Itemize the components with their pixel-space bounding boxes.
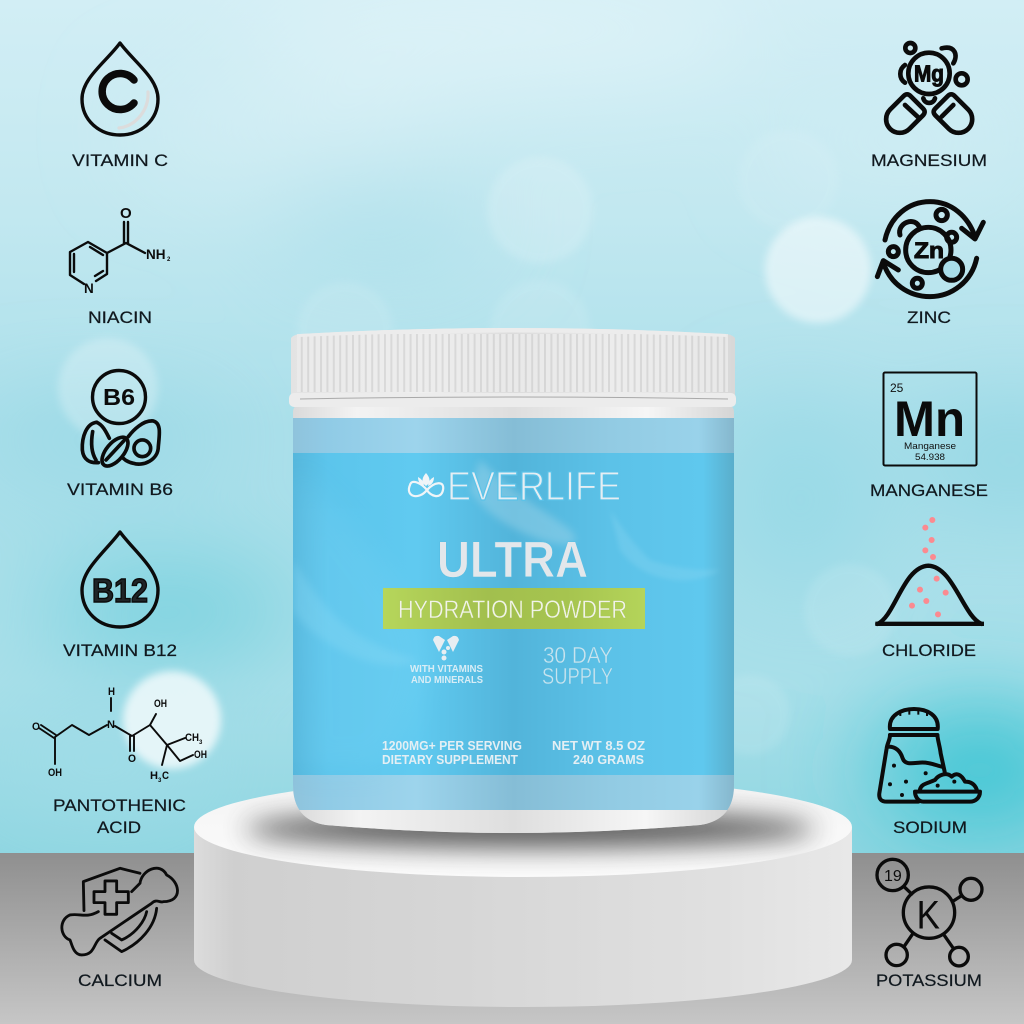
icon: periodic table tile: 25 [890,381,904,395]
icon: periodic table tile [884,372,976,466]
icon: periodic table tile: 54.938 [915,452,945,463]
callout: 30 day supply: SUPPLY [542,663,613,689]
nutrient: zinc [877,202,983,327]
icon: capsules and drops [433,636,459,660]
callout: 30 day supply [542,642,613,689]
nutrient: sodium [879,709,980,837]
label: VITAMIN C [72,152,168,170]
net weight: NET WT 8.5 OZ [552,739,645,753]
icon: infinity with leaves [409,473,443,496]
nutrient: potassium [876,859,982,990]
icon: pantothenic acid molecule: H [150,770,158,782]
icon: pantothenic acid molecule: O [32,721,40,733]
podium [194,777,852,1007]
icon: vitamin C drop [82,43,158,135]
serving info: 1200MG+ PER SERVING [382,739,522,753]
nutrient: calcium [62,868,177,990]
jar body [290,400,736,836]
icon: periodic table tile: Manganese [904,441,956,452]
icon: B12 drop: B12 [92,572,148,609]
icon: pantothenic acid molecule: OH [48,767,62,779]
icon: pantothenic acid molecule: OH [194,749,207,761]
nutrient: manganese [870,372,988,500]
nutrient: pantothenic acid [32,686,207,837]
green banner [383,588,645,629]
icon: pantothenic acid molecule: 3 [199,740,203,746]
brand name: EVERLIFE [447,463,621,509]
label: POTASSIUM [876,972,982,990]
icon: niacin molecule: O [120,205,132,222]
nutrient: chloride [875,517,984,660]
label: CALCIUM [78,972,162,990]
product jar [289,328,736,836]
icon: bone and shield [62,868,177,955]
label: SODIUM [893,819,967,837]
callout: with vitamins and minerals: AND MINERALS [411,675,483,686]
icon: salt mound [875,517,984,626]
icon: potassium atom: 19 [884,868,902,885]
callout: with vitamins and minerals: WITH VITAMINS [410,664,483,675]
icon: B6 with foods: B6 [103,384,135,410]
icon: pantothenic acid molecule: 3 [158,778,162,784]
net weight: 240 GRAMS [573,753,644,767]
icon: periodic table tile: Mn [894,391,965,447]
nutrient: vitamin C [72,43,168,170]
icon: pantothenic acid molecule: C [162,770,169,782]
net weight [552,739,645,767]
floor [0,853,1024,1024]
icon: Mg capsules: Mg [914,60,944,86]
icon: potassium atom: K [917,893,940,937]
icon: niacin molecule: NH [146,247,166,262]
icon: niacin molecule: N [84,281,94,296]
icon: pantothenic acid molecule [32,686,207,784]
label: CHLORIDE [882,642,976,660]
icon: niacin molecule: 2 [167,257,171,263]
label: PANTOTHENIC [53,797,186,815]
icon: pantothenic acid molecule: N [107,719,115,731]
label: VITAMIN B6 [67,481,173,499]
callout: 30 day supply: 30 DAY [543,642,613,668]
nutrient: vitamin B6 [67,370,173,499]
icon: salt shaker and bowl [879,709,980,802]
jar lid [289,328,736,407]
icon: pantothenic acid molecule: CH [185,732,199,744]
icon: potassium atom [877,859,982,966]
brand logo [409,463,621,509]
green banner: HYDRATION POWDER [398,596,627,624]
label: VITAMIN B12 [63,642,177,660]
icon: pantothenic acid molecule: O [128,753,136,765]
icon: pantothenic acid molecule: H [108,686,115,698]
nutrient: niacin [70,205,171,327]
serving info [382,739,522,767]
icon: pantothenic acid molecule: OH [154,698,167,710]
label [53,797,186,837]
jar shadow [245,810,815,848]
icon: niacin molecule [70,205,171,296]
nutrient: magnesium [871,43,987,170]
callout: with vitamins and minerals [410,664,483,686]
product name: ULTRA: ULTRA [437,531,588,588]
label: ZINC [907,309,951,327]
nutrient: vitamin B12 [63,532,177,660]
label: NIACIN [88,309,152,327]
icon: Zn cycle: Zn [914,238,944,263]
label: MAGNESIUM [871,152,987,170]
serving info: DIETARY SUPPLEMENT [382,753,518,767]
label: ACID [97,819,141,837]
label: MANGANESE [870,482,988,500]
